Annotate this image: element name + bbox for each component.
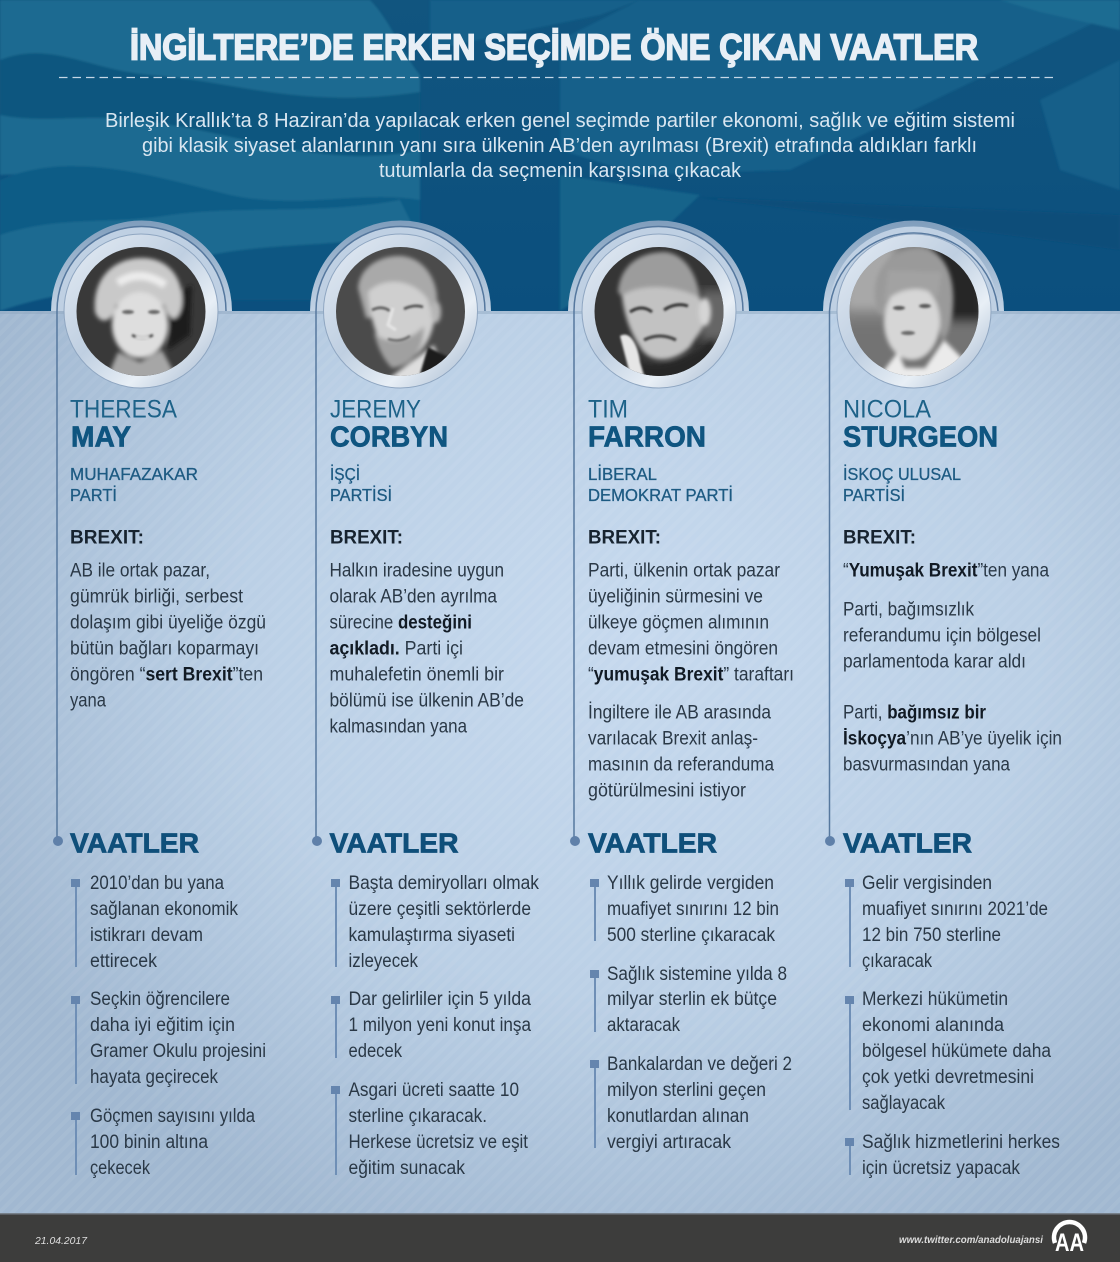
intro text [105,110,1015,182]
Brexit stance: Farron: Parti, ülkenin ortak pazar [588,560,781,582]
panel: Theresa May [51,221,266,1179]
pledges: Corbyn: VAATLER [330,828,458,858]
pledges: Sturgeon: sağlayacak [862,1093,945,1114]
pledges: Corbyn: eğitim sunacak [348,1158,465,1179]
Brexit stance: Farron: götürülmesini istiyor [588,780,747,802]
pledges: May [70,828,266,1179]
pledges: Corbyn: edecek [348,1041,402,1062]
pledges: May: çekecek [90,1158,150,1179]
Brexit stance: Farron: BREXIT: [588,528,661,548]
pledges: Sturgeon: Gelir vergisinden [862,873,992,894]
party: İskoç Ulusal Partisi [843,464,961,505]
pledges: May: hayata geçirecek [90,1067,218,1088]
pledges: Farron [588,828,792,1153]
party: İşçi Partisi [330,464,392,505]
name: Nicola Sturgeon: STURGEON [843,422,998,454]
name: Tim Farron [588,396,706,454]
name: Jeremy Corbyn: CORBYN [330,422,448,454]
icon: AA logo [1054,1222,1085,1257]
Brexit stance: May: bütün bağları koparmayı [70,638,259,660]
Brexit stance: May [70,528,266,712]
name: Jeremy Corbyn: JEREMY [330,396,421,424]
Brexit stance: Farron: “yumuşak Brexit” taraftarı [588,664,794,686]
header background: waving flag [0,0,1120,311]
pledges: Farron: milyar sterlin ek bütçe [607,989,777,1010]
Brexit stance: Farron [588,528,794,802]
party: Liberal Demokrat Parti: LİBERAL [588,464,657,484]
pledges: Sturgeon: Sağlık hizmetlerini herkes [862,1132,1060,1153]
Brexit stance: Sturgeon: Parti, bağımsız bir [843,702,987,724]
Brexit stance: May: gümrük birliği, serbest [70,586,244,608]
party: İskoç Ulusal Partisi: İSKOÇ ULUSAL [843,464,961,484]
Brexit stance: Farron: İngiltere ile AB arasında [588,702,771,724]
pledges: Corbyn: kamulaştırma siyaseti [348,925,515,946]
name: Theresa May: MAY [71,422,131,454]
pledges: Farron: Bankalardan ve değeri 2 [607,1054,792,1075]
pledges: Farron: Sağlık sistemine yılda 8 [607,964,787,985]
party: Muhafazakar Parti: MUHAFAZAKAR [70,464,198,484]
party: Liberal Demokrat Parti [588,464,733,505]
pledges: Sturgeon: Merkezi hükümetin [862,989,1008,1010]
Brexit stance: Farron: masının da referanduma [588,754,774,776]
pledges: Sturgeon: çok yetki devretmesini [862,1067,1034,1088]
Brexit stance: May: BREXIT: [70,528,144,548]
pledges: Farron: muafiyet sınırını 12 bin [607,899,779,920]
Brexit stance: Corbyn: BREXIT: [330,528,403,548]
portrait: Theresa May [64,234,218,388]
pledges: May: VAATLER [70,828,199,858]
panel: Nicola Sturgeon [823,221,1062,1179]
Brexit stance: Corbyn: Halkın iradesine uygun [330,560,504,582]
party: İskoç Ulusal Partisi: PARTİSİ [843,485,905,505]
name: Nicola Sturgeon: NICOLA [843,396,931,424]
pledges: May: 2010’dan bu yana [90,873,224,894]
pledges: Farron: VAATLER [588,828,717,858]
pledges: Corbyn: 1 milyon yeni konut inşa [348,1015,531,1036]
Brexit stance: Corbyn: kalmasından yana [330,716,467,738]
name: Jeremy Corbyn [330,396,448,454]
Brexit stance: Sturgeon: BREXIT: [843,528,916,548]
pledges: Farron: Yıllık gelirde vergiden [607,873,774,894]
Brexit stance: Sturgeon: referandumu için bölgesel [843,626,1041,646]
Brexit stance: Farron: ülkeye göçmen alımının [588,612,769,634]
name: Tim Farron: TIM [588,396,628,424]
intro text: gibi klasik siyaset alanlarının yanı sıra ülkenin AB’den ayrılması (Brexit) etrafında aldıkları farklı [142,135,977,157]
panel: Jeremy Corbyn [310,221,539,1179]
pledges: Sturgeon: ekonomi alanında [862,1015,1004,1036]
party: İşçi Partisi: İŞÇİ [330,464,360,484]
pledges: May: Seçkin öğrencilere [90,989,230,1010]
Brexit stance: Farron: varılacak Brexit anlaş- [588,728,758,750]
Brexit stance: Corbyn: sürecine desteğini [330,612,472,634]
Brexit stance: May: AB ile ortak pazar, [70,560,210,582]
Brexit stance: May: dolaşım gibi üyeliğe özgü [70,612,266,634]
pledges: Sturgeon: muafiyet sınırını 2021’de [862,899,1048,920]
name: Nicola Sturgeon [843,396,998,454]
panel: Tim Farron [568,221,794,1153]
Brexit stance: Sturgeon: Parti, bağımsızlık [843,600,974,620]
pledges: May: istikrarı devam [90,925,203,946]
Brexit stance: Corbyn: muhalefetin önemli bir [330,664,505,686]
Brexit stance: Corbyn: açıkladı. Parti içi [330,638,463,660]
pledges: Sturgeon: çıkaracak [862,951,932,972]
Brexit stance: Corbyn [330,528,524,738]
pledges: Sturgeon: 12 bin 750 sterline [862,925,1001,946]
source link: www.twitter.com/anadoluajansi [899,1234,1044,1246]
party: Liberal Demokrat Parti: DEMOKRAT PARTİ [588,485,733,505]
portrait: Tim Farron [582,234,736,388]
pledges: Farron: konutlardan alınan [607,1106,749,1127]
pledges: Corbyn [330,828,539,1179]
pledges: May: Göçmen sayısını yılda [90,1106,255,1127]
Brexit stance: Sturgeon: basvurmasından yana [843,754,1010,776]
pledges: Corbyn: Asgari ücreti saatte 10 [348,1080,519,1101]
Brexit stance: May: öngören “sert Brexit”ten [70,664,263,686]
name: Tim Farron: FARRON [588,422,706,454]
pledges: Sturgeon: VAATLER [843,828,972,858]
date: 21.04.2017 [34,1236,87,1247]
portrait: Jeremy Corbyn [324,234,478,388]
pledges: May: daha iyi eğitim için [90,1015,235,1036]
Brexit stance: Sturgeon: İskoçya’nın AB’ye üyelik için [843,728,1062,750]
intro text: Birleşik Krallık’ta 8 Haziran’da yapılacak erken genel seçimde partiler ekonomi, sağlık ve eğitim sistemi [105,110,1015,132]
pledges: Farron: aktaracak [607,1015,680,1036]
name: Theresa May: THERESA [70,396,177,424]
footer bar [0,1213,1120,1262]
portrait: Nicola Sturgeon [837,234,991,392]
Brexit stance: Farron: üyeliğinin sürmesini ve [588,586,763,608]
party: Muhafazakar Parti: PARTİ [70,485,117,505]
intro text: tutumlarla da seçmenin karşısına çıkacak [379,160,742,182]
icon: AA logo: AA [1055,1229,1084,1257]
pledges: May: Gramer Okulu projesini [90,1041,266,1062]
Brexit stance: Sturgeon [843,528,1062,776]
Brexit stance: Sturgeon: parlamentoda karar aldı [843,652,1026,672]
pledges: May: ettirecek [90,951,157,972]
pledges: Sturgeon [843,828,1060,1179]
pledges: Farron: 500 sterline çıkaracak [607,925,775,946]
Brexit stance: Corbyn: bölümü ise ülkenin AB’de [330,690,524,712]
pledges: Sturgeon: için ücretsiz yapacak [862,1158,1020,1179]
pledges: Corbyn: sterline çıkaracak. [348,1106,487,1127]
pledges: Farron: milyon sterlini geçen [607,1080,766,1101]
Brexit stance: Corbyn: olarak AB’den ayrılma [330,586,497,608]
pledges: Corbyn: Başta demiryolları olmak [348,873,539,894]
party: İşçi Partisi: PARTİSİ [330,485,392,505]
pledges: Sturgeon: bölgesel hükümete daha [862,1041,1051,1062]
pledges: Corbyn: Herkese ücretsiz ve eşit [348,1132,529,1153]
pledges: Corbyn: izleyecek [348,951,418,972]
Brexit stance: May: yana [70,690,106,712]
Brexit stance: Farron: devam etmesini öngören [588,638,778,660]
name: Theresa May [70,396,177,454]
content panel background [0,311,1120,1215]
pledges: Corbyn: Dar gelirliler için 5 yılda [348,989,531,1010]
Brexit stance: Sturgeon: “Yumuşak Brexit”ten yana [843,560,1049,582]
party: Muhafazakar Parti [70,464,198,505]
pledges: Farron: vergiyi artıracak [607,1132,731,1153]
title: İNGİLTERE’DE ERKEN SEÇİMDE ÖNE ÇIKAN VAATLER [130,26,978,68]
pledges: May: 100 binin altına [90,1132,208,1153]
pledges: Corbyn: üzere çeşitli sektörlerde [348,899,531,920]
pledges: May: sağlanan ekonomik [90,899,238,920]
